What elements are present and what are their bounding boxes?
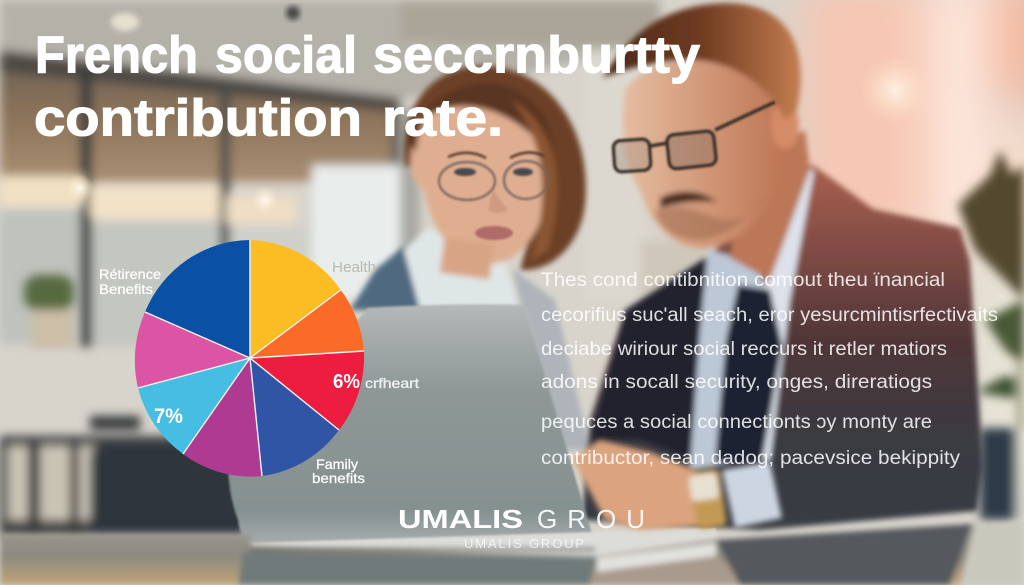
slice: purple: [183, 358, 262, 477]
pie value: 6%: crfheart: [365, 375, 419, 391]
pie value: 7%: 7%: [154, 405, 183, 428]
logo wordmark: UMALIS GROUP: [464, 536, 584, 551]
pie label: retirence benefits: Benefits: [99, 282, 153, 297]
slice: orange: [250, 290, 364, 358]
office interior: [0, 0, 710, 435]
woman: [350, 66, 590, 450]
laptop: [228, 304, 716, 555]
slice: pink: [135, 312, 250, 388]
title: seccrnburtty: [373, 26, 700, 84]
pie chart: [135, 240, 364, 477]
man: [582, 3, 983, 530]
typing hands and watch: [572, 440, 782, 530]
pie label: health: Health: [332, 259, 376, 276]
description text block: pequces a social connectionts ɔy monty are: [541, 412, 932, 433]
logo wordmark: UMALIS: [398, 504, 523, 534]
description text block: Thes cond contibnition comout theu ïnancial: [541, 270, 945, 291]
pie value: 6%: [333, 371, 419, 393]
logo wordmark: [398, 504, 645, 551]
description text block: [541, 270, 998, 469]
title: contribution: [34, 90, 362, 148]
title: French: [35, 26, 198, 84]
slice: red: [250, 351, 364, 430]
slice: light blue: [138, 358, 250, 454]
pie label: family benefits: Family: [316, 456, 358, 472]
title: rate.: [382, 90, 503, 148]
slice: blue family benefits: [250, 358, 339, 476]
plants and chairs: [958, 150, 1024, 300]
slice: yellow: [250, 240, 341, 358]
logo wordmark: GROU: [537, 504, 645, 534]
description text block: deciabe wiriour social reccurs it retler matiors: [541, 339, 947, 360]
slice: dark blue retirement: [145, 240, 250, 358]
pie label: family benefits: benefits: [312, 470, 365, 486]
pie label: family benefits: [312, 456, 365, 486]
description text block: adons in socall security, onges, direratiogs: [541, 372, 932, 393]
pie value: 6%: 6%: [333, 371, 360, 393]
description text block: cecorifius suc'all seach, eror yesurcmintisrfectivaits: [541, 305, 998, 326]
pie label: retirence benefits: [99, 267, 161, 297]
right-hand warm background: [800, 0, 1024, 470]
title: social: [215, 26, 357, 84]
title: [34, 26, 700, 148]
pie label: retirence benefits: Rétirence: [99, 267, 161, 282]
table and reflections: [0, 522, 1024, 585]
description text block: contribuctor, sean dadog; pacevsice bekippity: [541, 448, 961, 469]
